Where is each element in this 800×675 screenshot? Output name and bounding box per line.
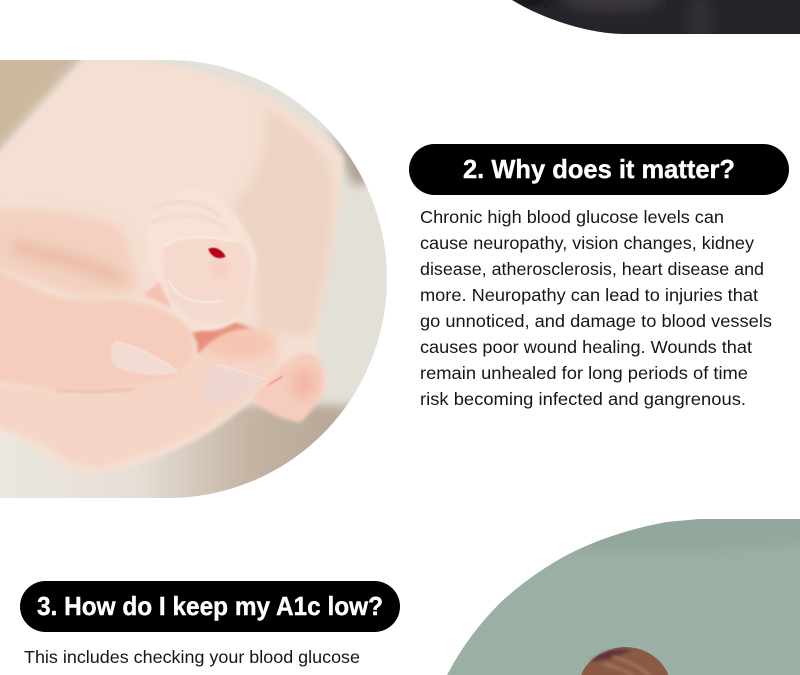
text block: why it matters: go unnoticed, and damage to blood vessels xyxy=(420,311,772,331)
text block: keeping A1c low: This includes checking your blood glucose xyxy=(24,647,360,667)
hand: warm shade on the right of the palm xyxy=(233,107,333,337)
hand: pink palm crease xyxy=(0,209,140,297)
heading pill: 2. Why does it matter?: 2. Why does it matter? xyxy=(463,154,735,184)
heading pill: 2. Why does it matter? xyxy=(409,144,789,195)
thumb xyxy=(158,219,256,333)
text block: why it matters: causes poor wound healing. Wounds that xyxy=(420,337,752,357)
heading pill: 3. How do I keep my A1c low? xyxy=(20,581,400,632)
photo: dark image cropped at top right xyxy=(512,0,800,34)
hand: palm and back of hand xyxy=(0,60,343,474)
hair xyxy=(580,647,670,675)
photo: hand with pricked fingertip xyxy=(0,60,387,498)
thumb nail xyxy=(168,280,221,318)
text block: why it matters: more. Neuropathy can lead to injuries that xyxy=(420,285,758,305)
lower fingernail xyxy=(202,366,263,404)
finger: ring fingertip xyxy=(252,353,325,422)
finger: pink fold xyxy=(192,322,253,354)
text block: why it matters xyxy=(420,207,772,409)
text block: why it matters: Chronic high blood glucose levels can xyxy=(420,207,724,227)
text block: why it matters: risk becoming infected and gangrenous. xyxy=(420,389,746,409)
text block: why it matters: cause neuropathy, vision changes, kidney xyxy=(420,233,754,253)
index fingernail xyxy=(110,342,178,375)
text block: why it matters: disease, atherosclerosis, heart disease and xyxy=(420,259,764,279)
photo: person against teal background xyxy=(447,519,800,675)
finger: lower finger and base of hand xyxy=(0,350,279,466)
heading pill: 3. How do I keep my A1c low?: 3. How do I keep my A1c low? xyxy=(37,591,383,621)
text block: why it matters: remain unhealed for long periods of time xyxy=(420,363,748,383)
blood drop xyxy=(208,248,226,258)
finger: index xyxy=(0,270,194,391)
